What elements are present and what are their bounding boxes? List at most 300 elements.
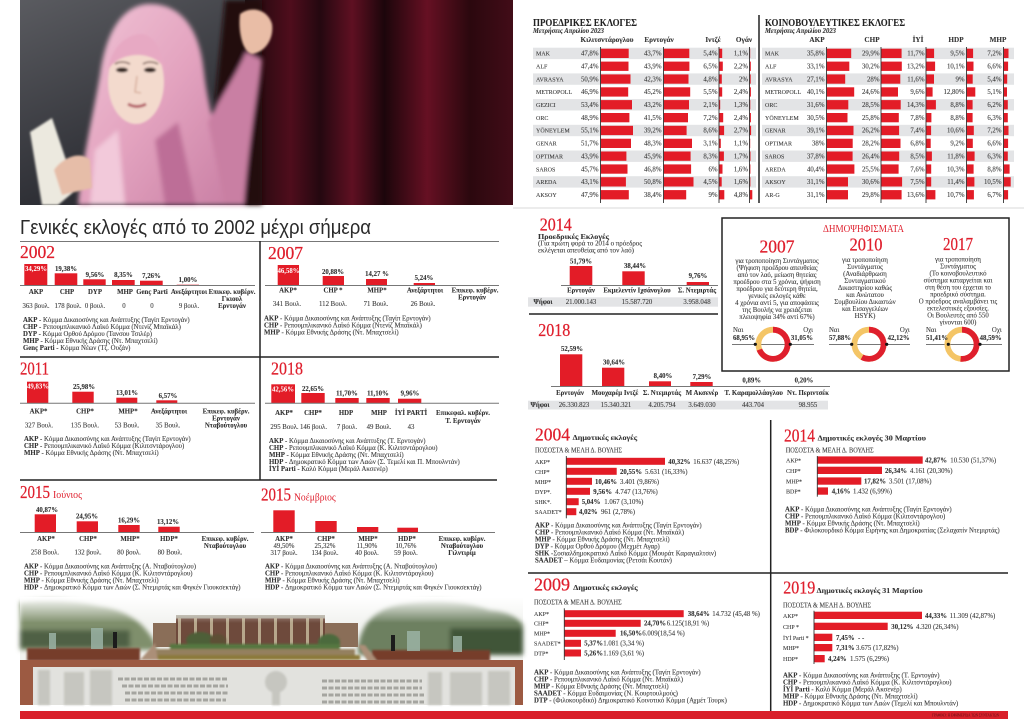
percentages: 52,59%	[561, 346, 583, 353]
values: Erdogan	[644, 51, 662, 199]
party labels: CHP*	[535, 470, 550, 476]
pollster names: GEZICI	[536, 103, 556, 109]
values: 16,50%	[620, 631, 642, 638]
party labels: Ερντογάν	[218, 302, 246, 310]
column headers: Ιντζέ	[705, 35, 721, 44]
referendum 2010: 42,12%	[888, 335, 910, 342]
year heading 2018: 2018	[271, 358, 303, 378]
values: IYI: 14,3%	[907, 102, 925, 109]
red bars: Ogan	[750, 49, 752, 199]
referendum 2010: 2010	[850, 235, 882, 255]
percentages	[25, 266, 198, 284]
pollster names: SAROS	[536, 167, 555, 173]
red bars: Erdogan	[664, 49, 694, 199]
values: Ogan: 1,6%	[734, 179, 748, 186]
pollster names: ORC	[536, 116, 548, 122]
referendum 2010: και Εισαγγελέων	[842, 306, 888, 313]
legend: CHP - Ρεπουμπλικανικό Λαϊκό Κόμμα (Ντενίζ Μπαϊκάλ)	[23, 324, 181, 331]
values: AKP: 37,8%	[807, 153, 825, 160]
legend: MHP - Κόμμα Εθνικής Δράσης (Ντ. Μπαχτσελί)	[23, 338, 158, 345]
values: HDP: 10,1%	[947, 64, 965, 70]
legend: SAADET - Κόμμα Ευδαιμονίας (Ν. Κουρτουλμούς)	[534, 691, 678, 698]
party labels	[535, 460, 562, 516]
values: MHP	[984, 51, 1002, 199]
values: Erdogan: 46,8%	[644, 166, 662, 173]
heading 2004: Δημοτικές εκλογές	[573, 433, 638, 442]
percentages: 9,96%	[401, 390, 420, 398]
legend: HDP - Δημοκρατικό Κόμμα των Λαών (Σ. Τεμελί και Π. Μπουλντάν)	[269, 459, 460, 466]
column headers: AKP	[809, 36, 825, 44]
percentages and seats: 40 βουλ.	[355, 550, 379, 557]
referendum 2007: από τον λαό, μείωση θητείας	[738, 272, 817, 279]
seats: 71 Βουλ.	[364, 301, 389, 308]
legend: CHP - Ρεπουμπλικανικό Λαϊκό Κόμμα (Κ. Κιλιτσντάρογλου)	[265, 571, 434, 578]
values: 38,64%	[688, 611, 710, 618]
percentages and seats: 11,90%	[357, 543, 378, 550]
legend: MHP - Κόμμα Εθνικής Δράσης (Ντ. Μπαχτσελί)	[783, 693, 918, 700]
values: 30,12%	[891, 624, 914, 631]
legend: HDP - Δημοκρατικό Κόμμα των Λαών (Σ. Ντεμιρτάς και Φιγκέν Γιουκσεκτάγ)	[265, 584, 482, 592]
values: 1.432 (6,99%)	[853, 488, 892, 496]
values: MHP: 5,1%	[987, 89, 1002, 96]
party labels: DYP*.	[535, 490, 552, 496]
legend: İYİ Parti - Καλό Κόμμα (Μεράλ Ακσενέρ)	[269, 466, 388, 473]
legend: CHP - Ρεπουμπλικανικό Λαϊκό Κόμμα (Ντενίζ Μπαϊκάλ)	[264, 323, 422, 330]
pollster names	[765, 52, 801, 199]
party labels: MHP*	[534, 632, 550, 638]
values: Ince: 8,3%	[703, 153, 718, 160]
values: Ince: 6%	[708, 166, 718, 173]
party labels: CHP*	[76, 409, 94, 416]
values: Erdogan: 43,2%	[644, 102, 662, 109]
referendum 2017: Συντάγματος	[940, 264, 976, 270]
values: 4,16%	[832, 488, 851, 496]
candidate labels: Τ. Καραμολλάογλου	[725, 389, 783, 397]
photo: Turkish parliament building and relief wall	[20, 597, 523, 705]
referendum 2007: 68,95%	[733, 335, 755, 342]
photo: woman in pink headscarf beside a voting booth curtain	[20, 0, 513, 205]
votes row	[528, 297, 718, 307]
values: HDP: 8,8%	[950, 102, 965, 109]
values: Ogan: 1,3%	[734, 102, 748, 109]
percentages	[36, 507, 179, 526]
values: HDP: 12,80%	[944, 89, 965, 96]
values: 7,45%	[836, 635, 855, 642]
year heading 2015 November: Νοέμβριος	[294, 491, 336, 503]
votes row: 3.649.030	[688, 402, 716, 409]
values: HDP	[944, 51, 965, 199]
bars	[27, 382, 177, 403]
values: Kilicdaroglu: 43,9%	[581, 153, 599, 160]
referendum 2007: της Βουλής να χρειάζεται	[742, 307, 812, 314]
referendum 2007: 4 χρόνια αντί 5, για αποφάσεις	[735, 300, 819, 307]
seats	[273, 301, 436, 308]
values: Ogan: 1,7%	[734, 153, 748, 160]
values: Ogan: 2,2%	[734, 64, 748, 70]
values: IYI: 7,5%	[910, 179, 925, 186]
candidate labels: Μουχαρέμ Ιντζέ	[592, 389, 638, 397]
year heading 2015 June	[20, 482, 83, 502]
footer credit: ΓΡΑΦΙΚΟ: Η ΕΦΗΜΕΡΙΔΑ ΤΩΝ ΣΥΝΤΑΚΤΩΝ	[932, 713, 999, 717]
main title: Γενικές εκλογές από το 2002 μέχρι σήμερα	[20, 216, 371, 239]
red bars: Kilicdaroglu	[600, 49, 633, 199]
values: Ince: 2,1%	[703, 102, 718, 109]
values: Kilicdaroglu: 51,7%	[581, 141, 599, 148]
pollster names: YÖNEYLEM	[765, 115, 799, 122]
values: 17,82%	[864, 478, 886, 486]
percentages	[272, 386, 420, 398]
heading 2009	[534, 575, 639, 595]
referendum 2017: 48,59%	[980, 335, 1002, 342]
party labels: AKP*	[37, 536, 55, 543]
values: 5,26%	[584, 650, 603, 658]
values: Kilicdaroglu: 53,4%	[581, 102, 599, 109]
candidate labels: Ερντογάν	[556, 389, 584, 397]
values: Erdogan: 39,2%	[644, 128, 662, 135]
percentages and seats: 59 βουλ.	[394, 550, 418, 557]
values: Erdogan: 43,9%	[644, 64, 662, 70]
legend: İYİ Parti - Καλό Κόμμα (Μεράλ Ακσενέρ)	[783, 686, 902, 693]
divider between poll tables	[758, 15, 760, 203]
values: Erdogan: 50,8%	[644, 179, 662, 186]
pollster names: OPTIMAR	[765, 142, 792, 148]
pollster names: AVRASYA	[765, 77, 793, 83]
values: CHP: 30,2%	[862, 64, 880, 70]
values: Ogan: 1,1%	[734, 141, 748, 148]
legend: CHP - Ρεπουμπλικανικό Λαϊκό Κόμμα (Κ. Κιλιτσντάρογλου)	[24, 571, 193, 578]
party labels: Επικεφαλ. κυβέρν.	[436, 409, 490, 417]
seats: 295 Βουλ.	[270, 424, 299, 431]
seats: 112 Βουλ.	[319, 301, 347, 308]
values: 16.637 (48,25%)	[693, 459, 739, 466]
party labels: MHP	[371, 410, 387, 417]
party labels: HDP*	[160, 536, 178, 543]
party labels: CHP *	[323, 288, 343, 294]
note	[538, 241, 642, 255]
pollster names: AREDA	[765, 167, 786, 173]
percentages: 22,65%	[302, 386, 324, 393]
percentages: 42,56%	[272, 386, 294, 394]
legend: AKP - Κόμμα Δικαιοσύνης και Ανάπτυξης (Ταγίπ Ερντογάν)	[264, 316, 431, 323]
values: Ogan	[734, 51, 748, 199]
referendum 2017: σύστημα καταργείται και	[924, 278, 992, 284]
column headers: HDP	[948, 36, 964, 44]
seats	[31, 550, 183, 557]
panel: June 2015 election	[20, 482, 254, 592]
party labels: SHK*.	[535, 500, 552, 506]
values	[584, 611, 760, 658]
legend	[265, 564, 482, 592]
values: Ince: 8,6%	[703, 128, 718, 135]
values: Erdogan: 41,5%	[644, 115, 662, 122]
seats: 7 βουλ.	[337, 424, 357, 431]
values: Kilicdaroglu	[581, 51, 599, 199]
panel: 2009 municipal election	[534, 575, 760, 705]
votes row: 26.330.823	[559, 402, 590, 409]
party labels: AKP*	[786, 458, 801, 464]
values: Ince: 5,4%	[703, 51, 718, 58]
pollster names: ALF	[765, 64, 777, 70]
seats: 43	[408, 424, 415, 431]
heading 2019: Δημοτικές εκλογές 31 Μαρτίου	[817, 586, 923, 595]
referendum 2017: στη θέση του έρχεται το	[925, 284, 992, 292]
values: Kilicdaroglu: 47,4%	[581, 64, 599, 70]
party labels: Τ. Ερντογάν	[445, 417, 481, 425]
percentages: 13,01%	[116, 390, 138, 397]
values: 3.401 (9,86%)	[620, 479, 659, 486]
party labels: AKP*	[279, 288, 297, 294]
legend	[785, 506, 1000, 534]
referendum 2007: για τροποποίηση Συντάγματος	[734, 258, 819, 265]
values: 40,32%	[668, 459, 691, 466]
values: 4.161 (20,30%)	[910, 468, 952, 475]
values: 11.309 (42,87%)	[950, 613, 995, 620]
values: AKP: 31,1%	[807, 192, 825, 199]
referendums heading: ΔΗΜΟΨΗΦΙΣΜΑΤΑ	[823, 224, 904, 235]
values: HDP: 10,7%	[947, 192, 965, 199]
values: Ogan: 1,6%	[734, 166, 748, 173]
votes row: 21.000.143	[566, 299, 597, 306]
bars	[817, 456, 923, 495]
values: Kilicdaroglu: 47,8%	[581, 51, 599, 58]
party labels: İYİ PARTİ	[395, 410, 428, 417]
pollster names: MAK	[765, 52, 780, 58]
values: IYI: 6,8%	[910, 141, 925, 148]
values: Ince: 6,5%	[703, 64, 718, 70]
seats: 146 βουλ.	[300, 424, 327, 431]
referendum 2007: προέδρου στα 5 χρόνια, ψήφιση	[733, 279, 821, 286]
values: CHP: 25,5%	[862, 166, 880, 173]
values: IYI: 13,2%	[907, 64, 925, 70]
referendum 2017	[919, 234, 1002, 359]
votes row	[528, 401, 828, 410]
values: 1.169 (3,61 %)	[603, 650, 644, 658]
panel: parliamentary polls table	[762, 17, 1014, 203]
referendum 2017: 51,41%	[926, 335, 948, 342]
values: IYI: 11,7%	[907, 51, 925, 58]
legend	[783, 672, 958, 707]
party labels: Ανεξάρτητοι	[171, 288, 208, 297]
values: MHP: 7,2%	[987, 51, 1002, 58]
values: HDP: 9,2%	[950, 141, 965, 148]
percentages: 38,44%	[624, 263, 646, 270]
seats	[22, 303, 199, 310]
pollster names: AKSOY	[765, 180, 786, 186]
percentages	[27, 384, 178, 400]
percentages: 9,76%	[689, 273, 708, 280]
pollster names: METROPOLL	[765, 90, 801, 96]
percentages: 9,56%	[86, 272, 105, 279]
referendum 2017: προεδρικό σύστημα.	[930, 292, 986, 298]
values: Ince	[703, 51, 718, 199]
values: Ince: 3,1%	[703, 141, 718, 148]
party labels: Επικεφ. κυβέρν.	[203, 408, 250, 416]
year heading 2015 November	[261, 484, 336, 504]
panel: 2002 election	[20, 242, 256, 352]
values: Ogan: 1,1%	[734, 51, 748, 58]
referendum 2010: Δικαστηρίου καθώς	[838, 285, 892, 292]
legend: DTP - (Φιλοκουρδικό) Δημοκρατικό Κοινοτικό Κόμμα (Αχμέτ Τουρκ)	[534, 698, 727, 705]
values: Ogan: 2%	[739, 76, 748, 83]
percentages and seats: 49,50%	[274, 543, 295, 550]
party labels	[29, 288, 256, 310]
legend: MHP - Κόμμα Εθνικής Δράσης (Ντ. Μπαχτσελί)	[269, 452, 404, 459]
panel: 2019 municipal election	[783, 577, 995, 707]
party labels	[783, 614, 809, 663]
party labels	[279, 286, 499, 302]
heading 2014	[784, 426, 926, 446]
legend: SAADET – Κόμμα Ευδαιμονίας (Ρετσάι Κουτάν)	[535, 558, 672, 565]
party labels: DYP	[88, 289, 102, 296]
pollster names: AVRASYA	[536, 77, 564, 83]
referendum 2007: προέδρου για δεύτερη θητεία,	[736, 286, 818, 293]
percentages: 11,70%	[336, 390, 358, 398]
party labels: CHP*	[534, 622, 549, 628]
party labels: Επικεφ. κυβέρν.	[209, 288, 256, 296]
values: 1.081 (3,34 %)	[603, 641, 644, 648]
referendum 2007: (Ψήφιση προέδρου απευθείας	[736, 265, 818, 272]
percentages: 8,35%	[114, 272, 133, 279]
values: 1.067 (3,10%)	[604, 499, 643, 506]
pollster names: SAROS	[765, 154, 784, 160]
values: AKP: 31,1%	[807, 179, 825, 186]
values: Kilicdaroglu: 48,9%	[581, 115, 599, 122]
candidate labels: Σ. Ντεμιρτάς	[643, 389, 681, 397]
party labels: Νταβούτογλου	[204, 542, 247, 550]
column headers: İYİ	[913, 34, 924, 44]
values: 9,56%	[593, 489, 612, 496]
percentages: 46,58%	[277, 268, 300, 275]
values: 1.575 (6,29%)	[850, 656, 889, 663]
values: CHP: 28%	[867, 76, 880, 83]
values	[828, 613, 995, 663]
values: HDP: 10,6%	[947, 128, 965, 135]
legend: DYP - Κόμμα Ορθού Δρόμου (Τανσου Τσιλέρ)	[23, 331, 152, 338]
panel: referendums	[722, 218, 1009, 371]
party labels	[275, 409, 490, 425]
year heading 2011: 2011	[20, 358, 49, 378]
values: 26,34%	[885, 468, 907, 475]
values: CHP: 29,8%	[862, 192, 880, 199]
values: IYI: 7,4%	[910, 128, 925, 135]
bars	[273, 510, 418, 532]
party labels	[30, 408, 250, 430]
values: Kilicdaroglu: 45,7%	[581, 166, 599, 173]
values: CHP: 28,2%	[862, 141, 880, 148]
values: 3.675 (17,82%)	[856, 645, 898, 652]
values: Ince: 7,2%	[703, 115, 718, 122]
year heading 2007: 2007	[268, 243, 303, 263]
values: Kilicdaroglu: 55,1%	[581, 128, 599, 135]
values: Erdogan: 43,7%	[644, 51, 662, 58]
referendum 2017: Ο πρόεδρος αναλαμβάνει τις	[919, 298, 998, 306]
footer bar	[20, 711, 1008, 719]
referendum 2017: εκτελεστικές εξουσίες.	[927, 306, 989, 312]
legend: MHP - Κόμμα Εθνικής Δράσης (Ντ. Μπαχτσελί)	[534, 684, 669, 691]
faint separator	[513, 207, 1024, 209]
party labels: HDP*	[783, 657, 798, 663]
legend: AKP - Κόμμα Δικαιοσύνης και Ανάπτυξης (Ταγίπ Ερντογάν)	[535, 523, 702, 530]
seats: 258 Βουλ.	[31, 550, 59, 557]
values: - -	[858, 635, 865, 642]
values: AKP: 31,6%	[807, 102, 825, 109]
party labels: Γιλντιρίμ	[448, 549, 476, 557]
party labels: AKP*	[535, 460, 550, 466]
party labels	[786, 458, 802, 496]
percentages and seats	[270, 543, 418, 557]
legend	[24, 436, 191, 457]
values: CHP: 28,5%	[862, 102, 880, 109]
values: MHP: 6,6%	[987, 64, 1002, 70]
pollster names: AR-G	[765, 193, 780, 199]
row bands	[762, 48, 1014, 188]
values: 4.747 (13,76%)	[615, 489, 658, 496]
year heading 2002: 2002	[20, 242, 55, 262]
pollster names: OPTIMAR	[536, 154, 563, 160]
values: AKP: 39,1%	[807, 128, 825, 135]
heading 2009: Δημοτικές εκλογές	[573, 583, 639, 592]
seats: 26 Βουλ.	[411, 301, 436, 308]
party labels: AKP*	[275, 536, 293, 543]
heading 2019	[783, 577, 923, 597]
legend: AKP - Κόμμα Δικαιοσύνης και Ανάπτυξης (Ταγίπ Ερντογάν)	[785, 506, 952, 513]
legend: CHP - Ρεπουμπλικανικό Λαϊκό Κόμμα (Ντ. Μπαϊκάλ)	[535, 530, 684, 537]
party labels: SAADET*	[535, 510, 562, 516]
values: IYI: 13,6%	[907, 192, 925, 199]
referendum 2017: (Το κοινοβουλευτικό	[930, 270, 987, 278]
values: Erdogan: 38,4%	[644, 192, 662, 199]
legend: BDP - Φιλοκουρδικό Κόμμα Ειρήνης και Δημοκρατίας (Σελαχατίν Ντεμιρτάς)	[785, 527, 1000, 534]
values: Ogan: 2,4%	[734, 89, 748, 96]
percentages and seats: 134 βουλ.	[311, 550, 339, 557]
values: IYI: 8,5%	[910, 153, 925, 160]
bars	[560, 354, 713, 386]
bars	[564, 610, 684, 656]
values: 24,70%	[644, 621, 666, 628]
percentages: 40,87%	[36, 507, 58, 514]
seats: 135 Βουλ.	[71, 423, 99, 430]
party labels: HDP*	[398, 536, 416, 543]
legend: SHK -Σοσιαλδημοκρατικό Λαϊκό Κόμμα (Μουράτ Καραγιαλτσιν)	[535, 551, 716, 558]
percentages: 16,29%	[118, 518, 140, 524]
bars	[566, 458, 665, 515]
values: 42,87%	[925, 458, 947, 464]
legend: CHP - Ρεπουμπλικανικό Λαϊκό Κόμμα (Κιλιτσντάρογλου)	[24, 443, 184, 450]
values	[579, 459, 739, 516]
column caption: ΠΟΣΟΣΤΑ & ΜΕΛΗ Δ. ΒΟΥΛΗΣ	[534, 600, 622, 607]
referendum 2007: 2007	[760, 237, 794, 257]
values: Ogan: 2,7%	[734, 128, 748, 135]
red bars: MHP	[1004, 49, 1011, 199]
percentages: 1,00%	[179, 277, 198, 284]
axes	[600, 47, 750, 203]
subheading: April 2023: Μετρήσεις Απριλίου 2023	[764, 28, 837, 35]
values: IYI: 11,6%	[907, 76, 925, 83]
bars	[271, 384, 421, 403]
percentages: 14,27 %	[365, 271, 389, 278]
candidate labels: Μ Ακσενέρ	[686, 389, 719, 397]
legend: MHP - Κόμμα Εθνικής Δράσης (Ντ. Μπαχτσελί)	[535, 537, 670, 544]
percentages: 24,95%	[76, 514, 98, 520]
percentages: 13,12%	[157, 519, 179, 526]
seats: 178 βουλ.	[54, 303, 82, 310]
party labels: Γκιουλ	[222, 296, 243, 303]
referendum 2010: 57,88%	[829, 335, 851, 342]
party labels: AKP	[29, 289, 43, 296]
grid rules of general elections section	[20, 241, 499, 480]
referendum 2010: και Ανώτατου	[846, 292, 885, 299]
seats: 132 βουλ.	[74, 550, 102, 557]
